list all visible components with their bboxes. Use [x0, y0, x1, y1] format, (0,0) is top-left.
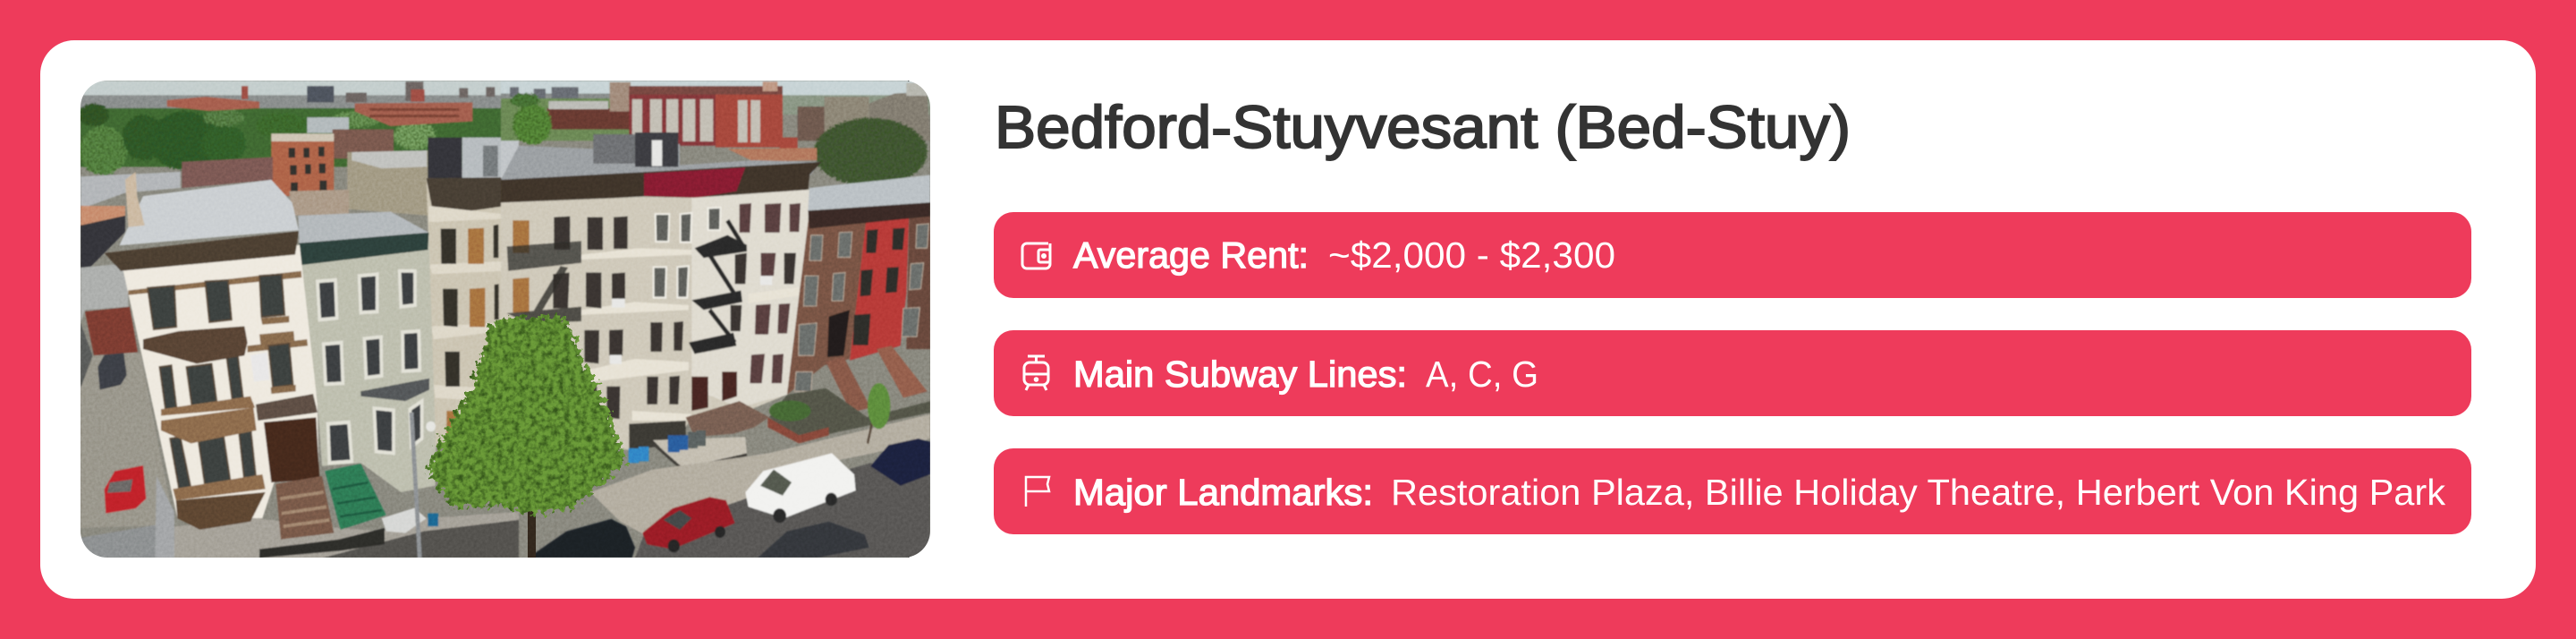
info bar: major landmarks — [994, 448, 2471, 534]
label: average rent: Average Rent: — [1073, 234, 1309, 276]
icon: wallet — [1022, 243, 1050, 268]
photo grain overlay — [80, 81, 930, 558]
icon: flag — [1026, 477, 1049, 507]
value: subway lines: A, C, G — [1426, 354, 1538, 395]
label: main subway lines: Main Subway Lines: — [1073, 354, 1407, 395]
photo: Bed-Stuy brownstone street — [79, 81, 930, 558]
label: major landmarks: Major Landmarks: — [1073, 472, 1373, 513]
value: landmark list: Restoration Plaza, Billie Holiday Theatre, Herbert Von King Park — [1391, 472, 2446, 513]
heading: Bedford-Stuyvesant (Bed-Stuy) — [995, 94, 1851, 161]
info bar: average rent — [994, 212, 2471, 298]
info bar: subway lines — [994, 330, 2471, 416]
icon: tram — [1024, 356, 1048, 390]
street tree in foreground — [427, 317, 626, 558]
value: rent range: ~$2,000 - $2,300 — [1328, 234, 1615, 276]
